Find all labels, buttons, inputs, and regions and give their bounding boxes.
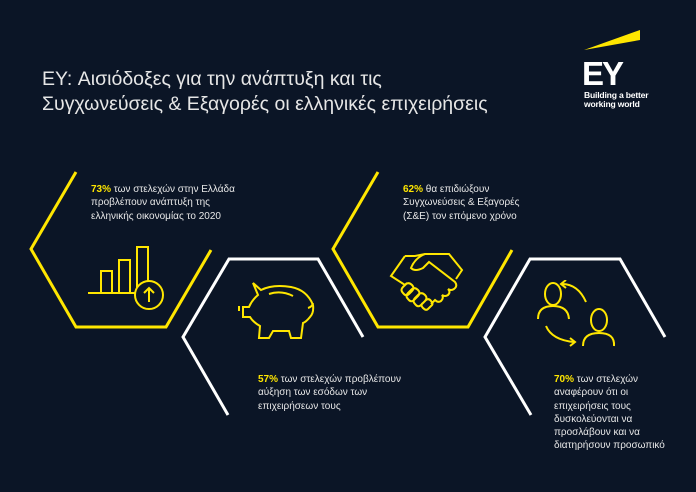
- text: 73%: προβλέπουν ανάπτυξη της: [91, 197, 210, 208]
- text: 57%: αύξηση των εσόδων των: [258, 387, 367, 398]
- logo: EY: Building a better: [584, 90, 648, 100]
- title: [42, 68, 488, 115]
- text: 70%: διατηρήσουν προσωπικό: [554, 440, 665, 451]
- text: 62%: [403, 184, 520, 222]
- icon: piggy bank: [238, 282, 314, 339]
- title: Συγχωνεύσεις & Εξαγορές οι ελληνικές επιχειρήσεις: [42, 93, 488, 115]
- text: 57%: επιχειρήσεων τους: [258, 401, 341, 412]
- text: 62%: 62% θα επιδιώξουν: [403, 184, 489, 195]
- icon: handshake: [390, 253, 464, 311]
- text: 70%: [554, 374, 665, 451]
- text: 70%: δυσκολεύονται να: [554, 414, 632, 425]
- text: 70%: αναφέρουν ότι οι: [554, 387, 628, 398]
- text: 73%: [91, 184, 235, 222]
- icon: bar chart: [88, 246, 164, 310]
- text: 62%: (Σ&Ε) τον επόμενο χρόνο: [403, 211, 517, 222]
- text: 70%: 70% των στελεχών: [554, 374, 638, 385]
- text: 57%: 57% των στελεχών προβλέπουν: [258, 374, 401, 385]
- text: 57%: [258, 374, 401, 412]
- title: EY: Αισιόδοξες για την ανάπτυξη και τις: [42, 68, 382, 90]
- icon: people exchange: [537, 280, 615, 347]
- text: 70%: επιχειρήσεις τους: [554, 401, 631, 412]
- text: 73%: 73% των στελεχών στην Ελλάδα: [91, 184, 235, 195]
- text: 62%: Συγχωνεύσεις & Εξαγορές: [403, 197, 519, 208]
- text: 70%: προσλάβουν και να: [554, 427, 640, 438]
- text: 73%: ελληνικής οικονομίας το 2020: [91, 211, 221, 222]
- logo: EY: [582, 30, 648, 109]
- logo: EY: working world: [584, 99, 640, 109]
